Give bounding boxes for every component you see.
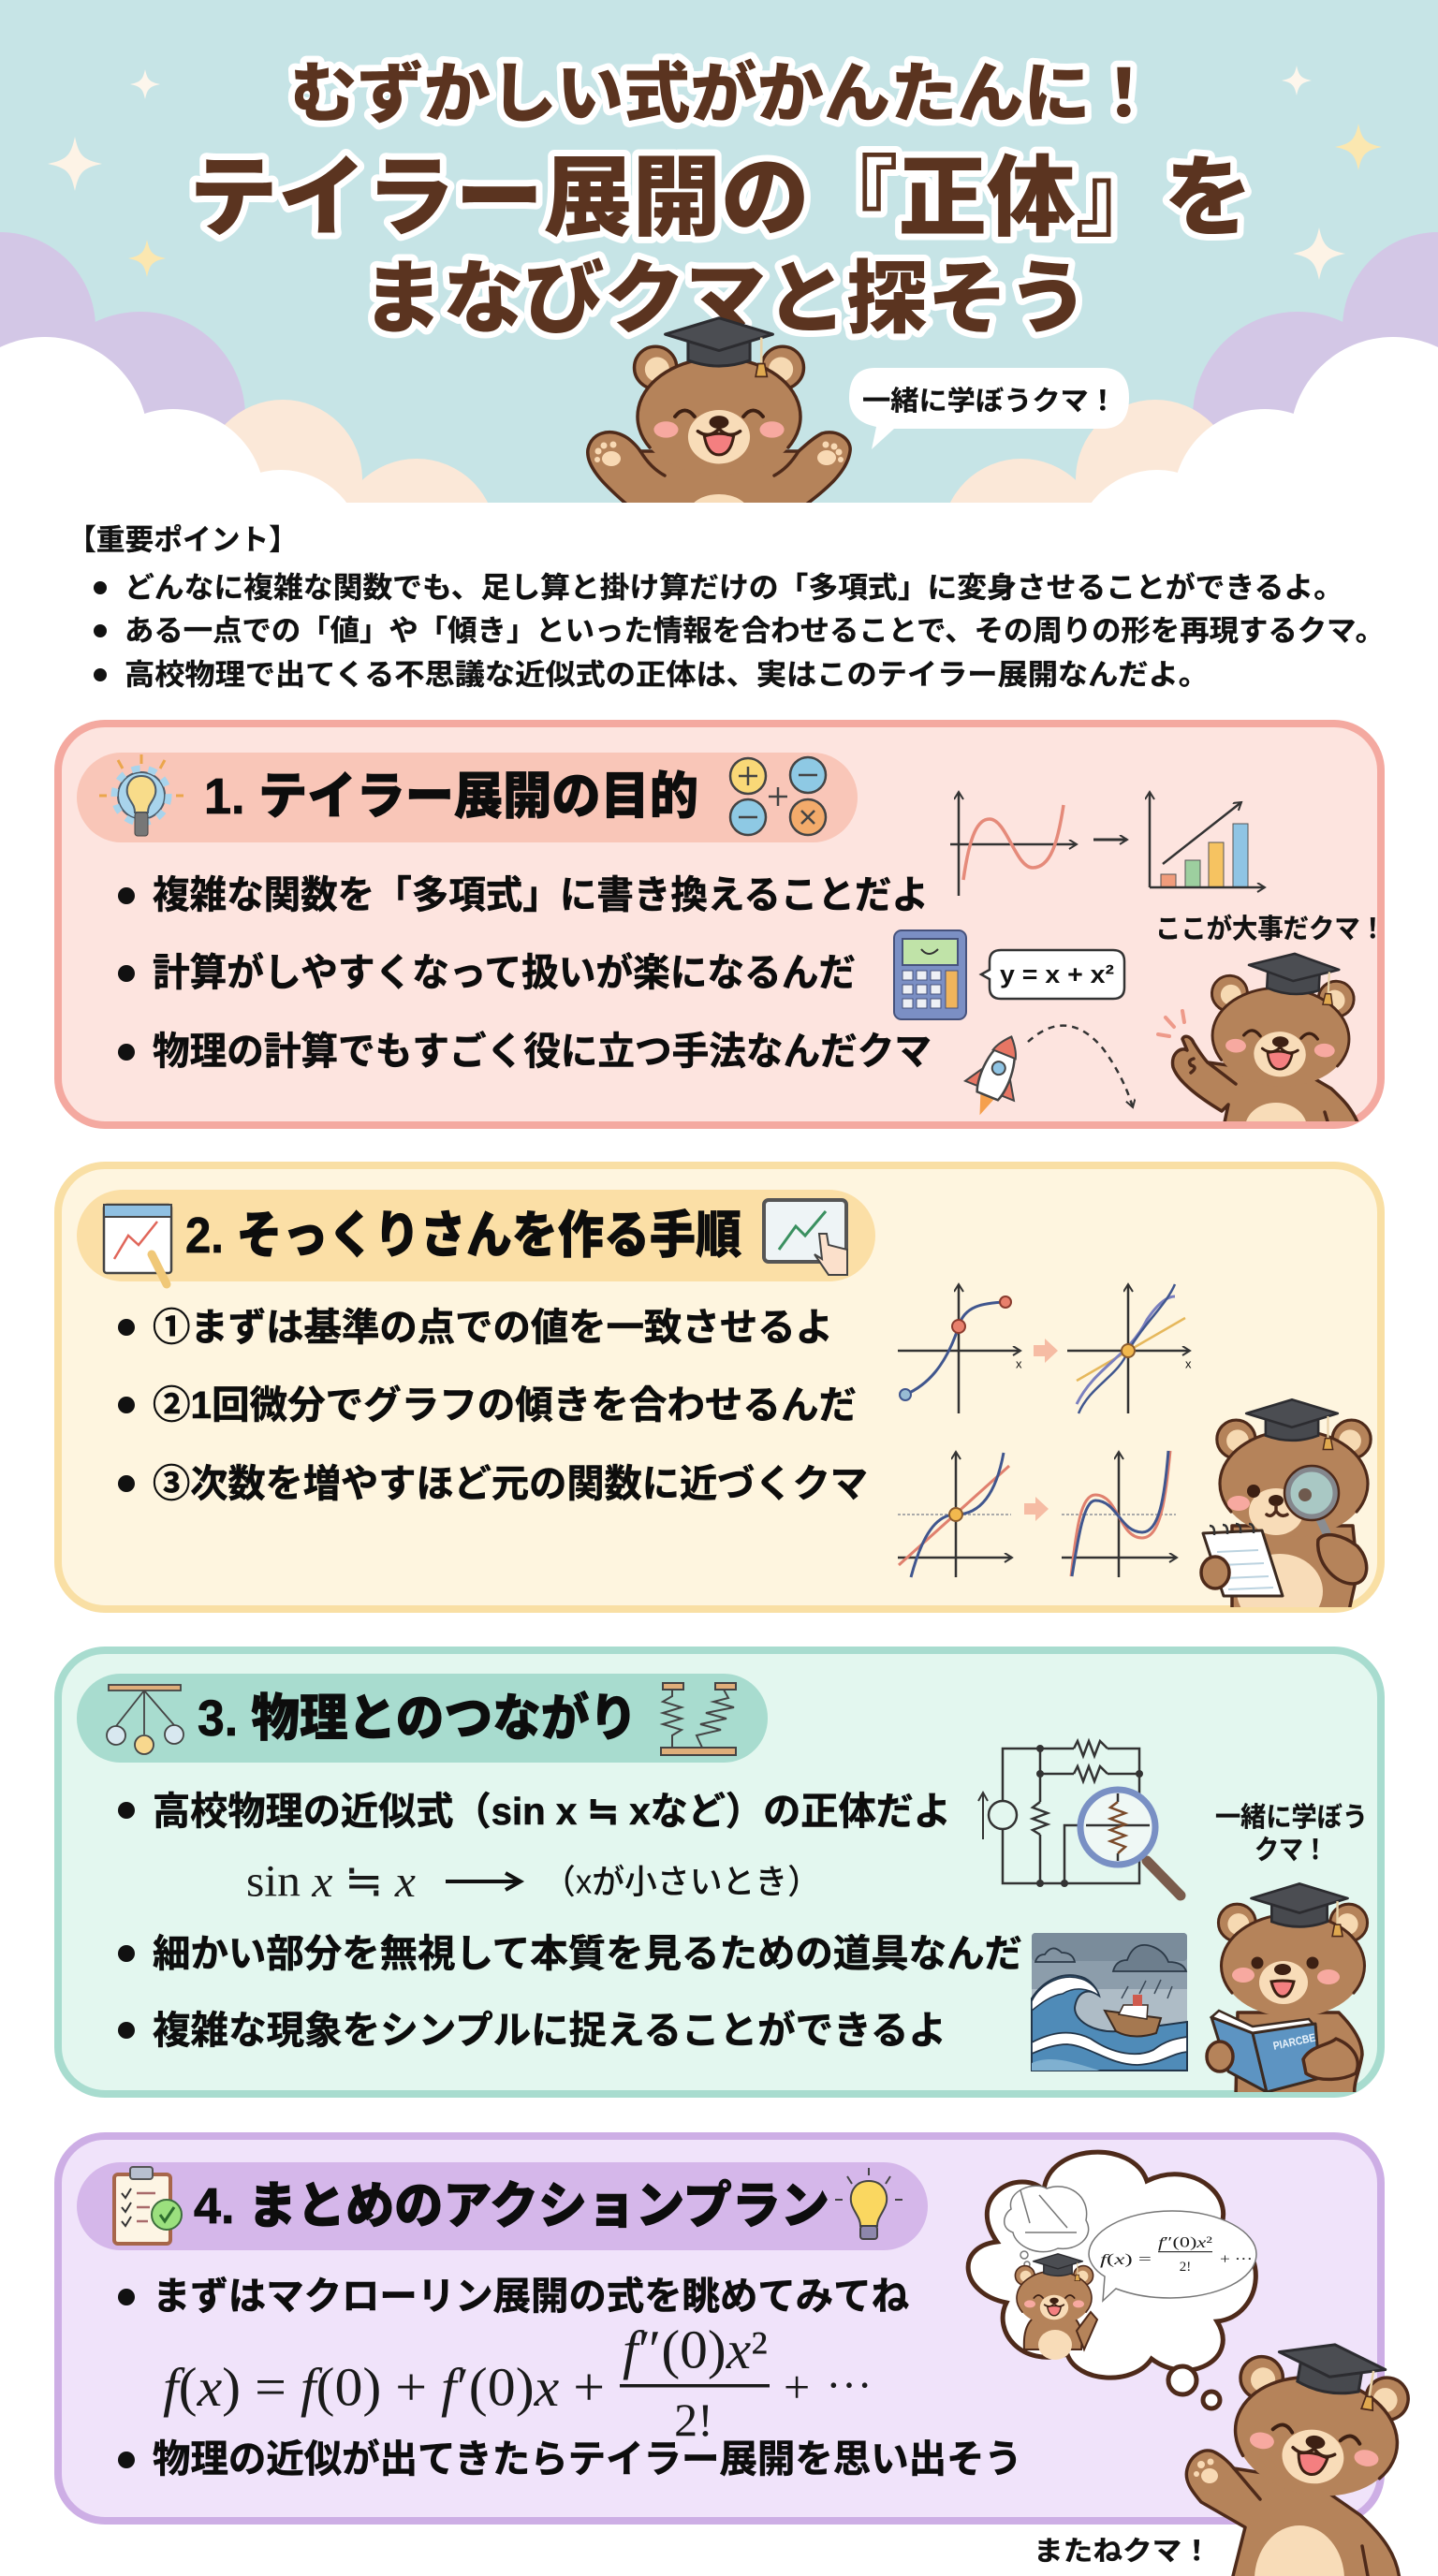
arrow between lower charts [1024,1497,1049,1521]
caption bear 1: ここが大事だクマ！ [1155,913,1386,944]
title [189,57,1253,344]
panel 4: action plan [58,2136,1381,2521]
key points [67,524,1385,691]
title: まなびクマと探そう [362,255,1089,344]
speech bubble: series: 2! [1180,2260,1191,2275]
speech bubble: formula [981,950,1124,999]
bullets panel 2: ③次数を増やすほど元の関数に近づくクマ [153,1462,868,1505]
caption bear 3: 一緒に学ぼう [1215,1802,1368,1833]
formula: sin x approx [246,1857,820,1906]
chart: first order [898,1452,1012,1577]
bullets panel 3: 細かい部分を無視して本質を見るための道具なんだ [153,1932,1022,1975]
clouds: cream layer [203,400,1235,618]
speech bubble: header: 一緒に学ぼうクマ！ [862,386,1117,417]
panel 3: physics [58,1650,1381,2097]
mini bear [1015,2254,1097,2360]
formula: sin x approx: sin x ≒ x [246,1857,416,1906]
formula: sin x approx: （xが小さいとき） [543,1863,820,1900]
sparkles [48,66,1382,280]
notepad [1203,1524,1283,1596]
heading pill 2 [77,1190,875,1281]
mascot: bear reading [1207,1883,1368,2097]
small thought bubbles [1168,2366,1220,2408]
key points: どんなに複雑な関数でも、足し算と掛け算だけの「多項式」に変身させることができるよ。 [125,571,1343,605]
formula: Maclaurin series: f(x) = f(0) + f′(0)x + [163,2357,605,2417]
heading pill 4 [77,2162,928,2250]
bullets panel 1: 物理の計算でもすごく役に立つ手法なんだクマ [153,1030,932,1073]
clouds: white front layer [0,337,1438,635]
chart: higher order [1062,1451,1177,1577]
chart: value match: x [1016,1357,1022,1370]
mascot: pointing bear [1156,953,1359,1121]
mascot: header bear [588,318,850,532]
caption: goodbye: またねクマ！ [1034,2537,1211,2567]
icon: springs [661,1683,736,1755]
icon: calculator [894,930,966,1019]
speech bubble: series: + ··· [1220,2252,1253,2267]
panel 1: purpose [58,724,1386,1153]
bullets panel 1: 計算がしやすくなって扱いが楽になるんだ [153,951,856,994]
chart: circuit with magnifier [978,1741,1181,1895]
clouds: purple back layer [0,232,1438,521]
heading pill 2: 2. そっくりさんを作る手順 [185,1208,741,1264]
icon: pendulum [107,1685,183,1754]
speech bubble: header [849,368,1129,449]
speech bubble: series: f(x) = [1100,2252,1152,2267]
title: テイラー展開の『正体』を [189,148,1253,247]
icon: clipboard [114,2167,182,2244]
key points: 【重要ポイント】 [67,524,298,556]
chart: slope match [1067,1284,1192,1413]
bullets panel 2: ①まずは基準の点での値を一致させるよ [153,1306,833,1349]
icon: light bulb [835,2168,902,2239]
speech bubble: series [1089,2211,1256,2301]
heading pill 3: 3. 物理とのつながり [198,1690,638,1747]
bullets panel 2: ②1回微分でグラフの傾きを合わせるんだ [153,1383,857,1427]
formula: Maclaurin series: 2! [674,2393,713,2446]
bullets panel 4 [118,2275,1022,2481]
icon: browser chart [104,1205,171,1284]
formula: Maclaurin series [163,2320,873,2446]
icon: tablet with hand [764,1200,847,1275]
bullets panel 4: まずはマクローリン展開の式を眺めてみてね [153,2275,909,2318]
panel 2: procedure [58,1165,1381,1629]
icon: rocket and path [956,1026,1133,1125]
bullets panel 2 [118,1306,868,1505]
bullets panel 1: 複雑な関数を「多項式」に書き換えることだよ [153,873,929,916]
heading pill 1: 1. テイラー展開の目的 [204,768,698,825]
bullets panel 3: 複雑な現象をシンプルに捉えることができるよ [153,2009,946,2052]
formula: Maclaurin series: + ⋯ [784,2361,873,2413]
chart: value match [898,1284,1022,1413]
title: むずかしい式がかんたんに！ [290,57,1157,130]
icon: gear bulb [99,754,183,836]
key points: ある一点での「値」や「傾き」といった情報を合わせることで、その周りの形を再現するクマ。 [125,614,1385,648]
chart: slope match: x [1185,1357,1192,1370]
bullets panel 1 [118,873,932,1073]
mascot: waving bear [1186,2330,1416,2576]
caption bear 3: クマ！ [1255,1836,1328,1866]
bullets panel 3 [118,1790,1022,2052]
chart: curve to bars [950,792,1265,896]
caption bear 3 [1215,1802,1368,1866]
bullets panel 4: 物理の近似が出てきたらテイラー展開を思い出そう [153,2437,1022,2481]
book: PIARCBE [1272,2031,1316,2053]
speech bubble: formula: y = x + x² [1000,960,1114,988]
key points: 高校物理で出てくる不思議な近似式の正体は、実はこのテイラー展開なんだよ。 [125,659,1209,691]
bullets panel 3: 高校物理の近似式（sin x ≒ xなど）の正体だよ [153,1790,951,1833]
illustration: stormy wave and ship [1032,1933,1187,2071]
icon: arithmetic symbols [730,757,826,835]
heading pill 3 [77,1674,768,1763]
heading pill 4: 4. まとめのアクションプラン [194,2178,829,2234]
book [1211,2011,1320,2092]
arrow between charts [1034,1339,1058,1363]
header background [0,0,1438,635]
inner thought [1005,2186,1089,2267]
formula: Maclaurin series: f″(0)x² [623,2320,768,2379]
mascot: bear with magnifier [1201,1399,1371,1629]
heading pill 1 [77,753,858,842]
speech bubble: series: f″(0) x² [1158,2235,1212,2250]
thought cloud [968,2152,1256,2408]
